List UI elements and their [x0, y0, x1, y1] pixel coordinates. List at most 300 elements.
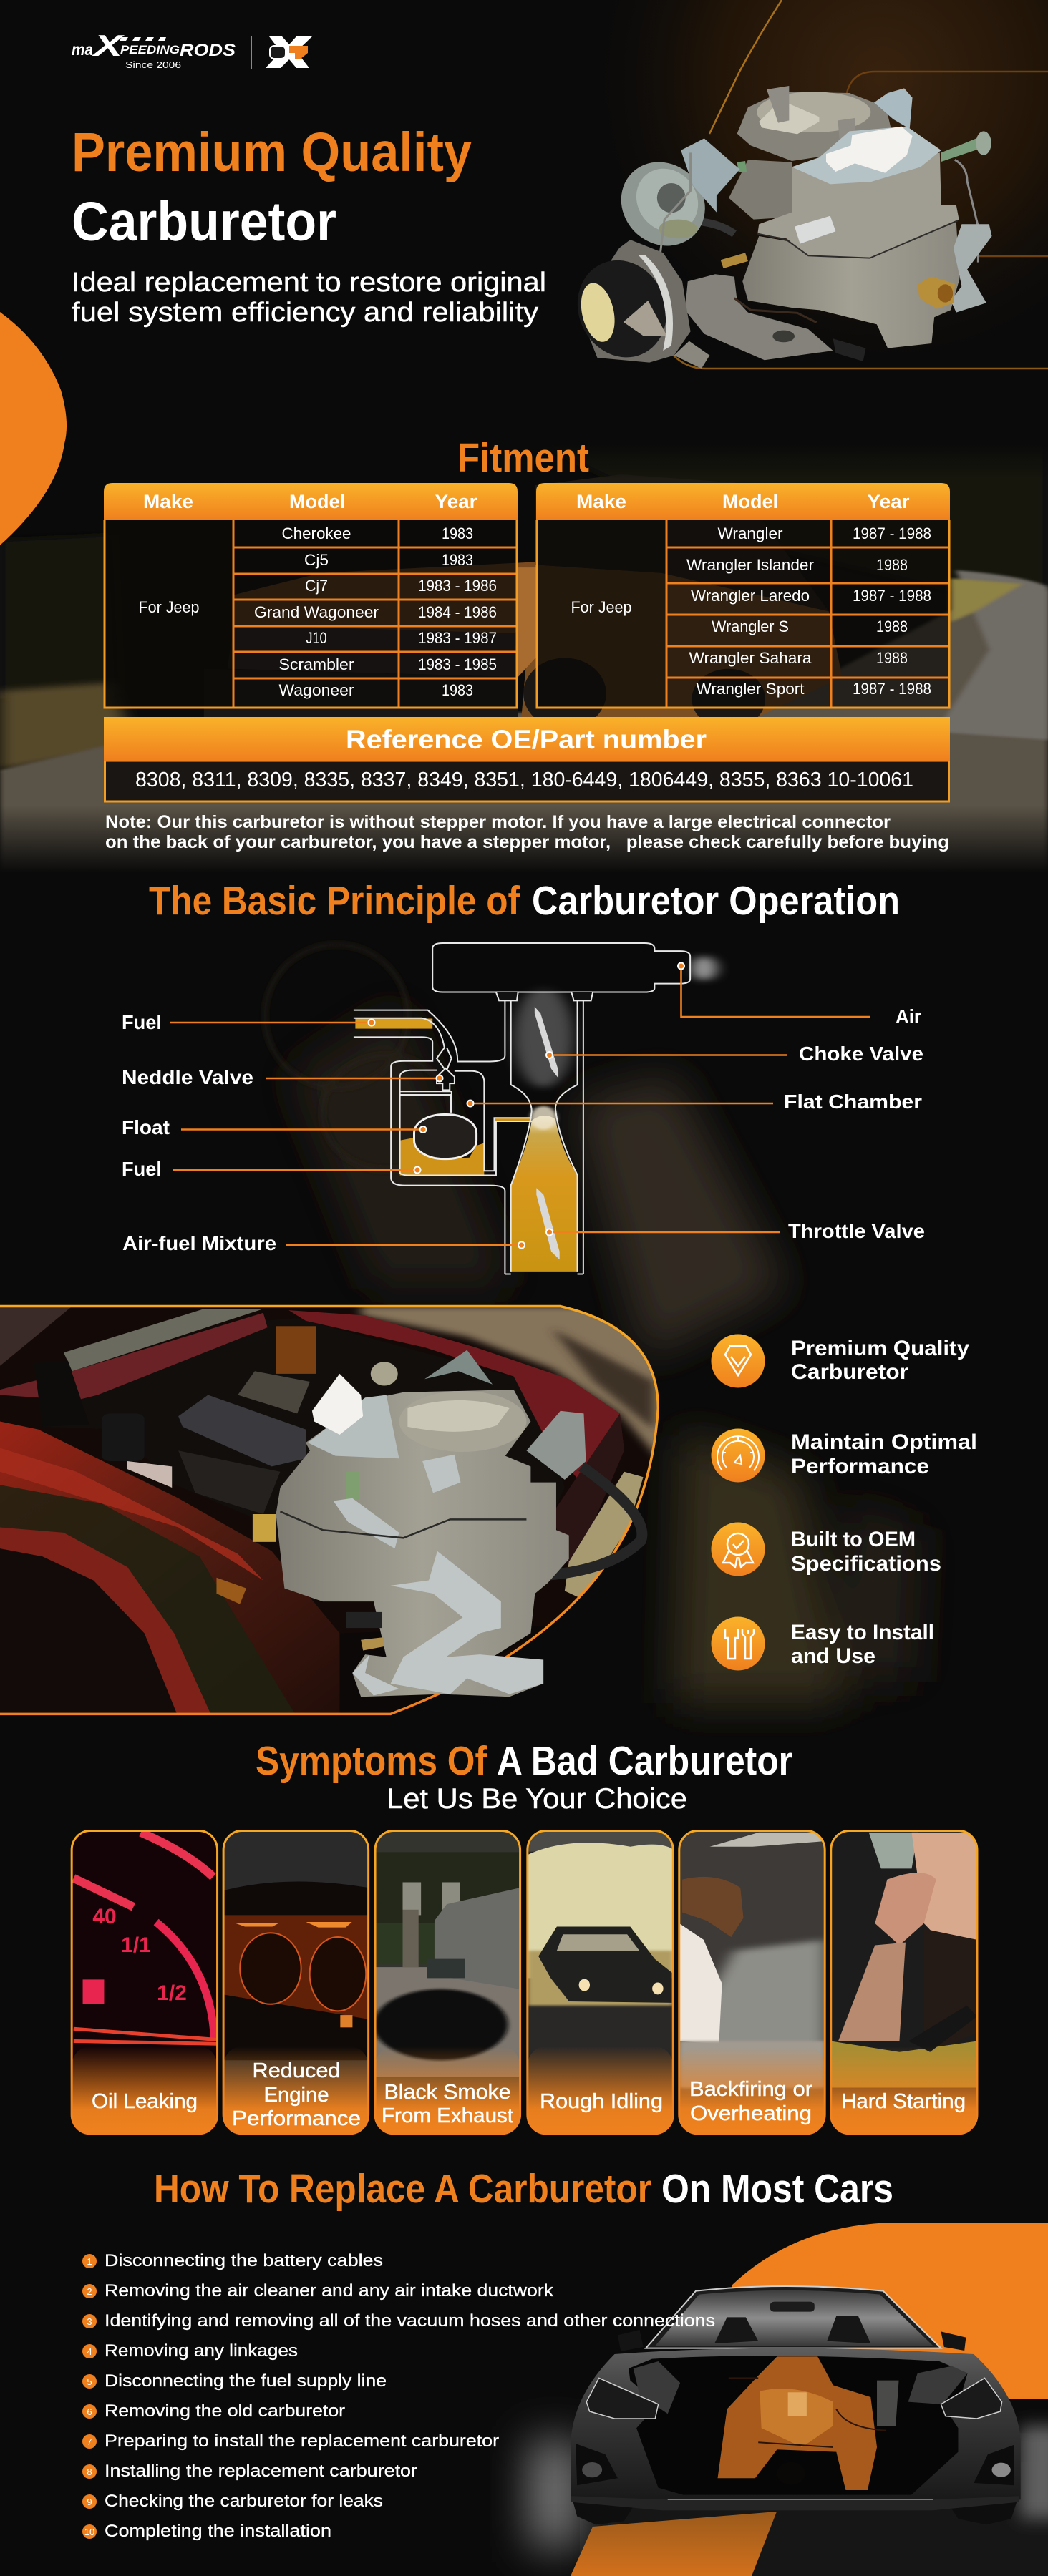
body seam [757, 220, 958, 258]
right grille [552, 1413, 624, 1567]
table right models: Wrangler Sahara [689, 649, 812, 667]
diagram labels [122, 1005, 925, 1254]
engine top [238, 1371, 310, 1413]
brass nipple [361, 1637, 384, 1651]
stepper motor note: on the back of your carburetor, you have a stepper motor, please check carefully before buying [105, 832, 949, 852]
rear-view mirror [770, 2302, 815, 2312]
card image: black smoke [373, 1830, 520, 2134]
symptom labels: Overheating [690, 2102, 812, 2125]
outlet pipe [674, 341, 709, 369]
choke link [422, 1455, 461, 1493]
horn [399, 1391, 526, 1452]
white cap [826, 127, 913, 173]
logo wordmark: PEEDING [120, 43, 180, 57]
table left years: 1983 - 1987 [418, 629, 497, 647]
white cap [312, 1374, 363, 1435]
table left years: 1983 - 1986 [418, 577, 497, 595]
mixture column [511, 1116, 578, 1272]
splitter highlight [668, 2499, 933, 2500]
fitment background photo [0, 441, 1048, 887]
hero title line 1: Premium Quality [72, 122, 472, 183]
feature text [791, 1528, 941, 1576]
engine dark bore [777, 2462, 805, 2485]
top left strut [0, 1307, 72, 1366]
step number digits: 6 [87, 2406, 92, 2417]
table right years: 1987 - 1988 [853, 680, 931, 698]
step text: Checking the carburetor for leaks [105, 2492, 383, 2511]
horn opening [757, 92, 870, 132]
coolant cap [371, 1362, 398, 1386]
fog lamp left [582, 2462, 602, 2477]
yellow insulator [576, 280, 619, 344]
logo X badge [266, 36, 312, 68]
diagram labels: Fuel [122, 1158, 162, 1180]
table left years [418, 525, 497, 699]
card image: hard starting [831, 1830, 977, 2134]
left glass [64, 1309, 263, 1371]
symptom card images [72, 1830, 977, 2134]
table right models: Wrangler [717, 525, 783, 542]
table left column titles [143, 491, 477, 512]
throttle valve plate [536, 1188, 560, 1259]
step text: Removing the air cleaner and any air intake ductwork [105, 2281, 554, 2301]
table right years: 1987 - 1988 [853, 587, 931, 605]
panel outline [0, 1307, 658, 1714]
tube end [976, 131, 991, 155]
gauge markings: 40 [92, 1905, 117, 1928]
step number digits: 7 [87, 2436, 92, 2447]
symptom labels [92, 2059, 966, 2130]
passage fuel [494, 1118, 532, 1121]
logo checker marks [120, 37, 166, 41]
black hose [702, 222, 734, 234]
fog lights [576, 2444, 1014, 2485]
red fender [0, 1421, 382, 1717]
seats [714, 2316, 870, 2343]
diagram labels: Fuel [122, 1011, 162, 1033]
feature: performance [712, 1428, 977, 1483]
jeep side [521, 565, 842, 718]
inlet fuel [355, 1019, 432, 1029]
lid plate [308, 1395, 399, 1458]
air intake glow [691, 957, 717, 980]
card image: fuel gauge [72, 1830, 218, 2134]
table right column titles: Year [868, 491, 910, 512]
table left frame [105, 520, 517, 708]
feature text [791, 1337, 969, 1384]
throat walls [354, 1000, 583, 1274]
table left make cell [104, 520, 233, 708]
carburetor on panel [253, 1350, 642, 1697]
choke housing [568, 240, 691, 365]
table right header [536, 483, 950, 520]
diaphragm [526, 1411, 586, 1480]
engine highlight [760, 2389, 833, 2447]
windshield [655, 2290, 933, 2346]
diagram heading: Carburetor Operation [532, 878, 900, 924]
green tube [941, 136, 982, 162]
step text: Removing any linkages [105, 2341, 298, 2361]
left hillside [6, 537, 103, 690]
lower road fade [0, 812, 1048, 873]
table left column titles: Make [143, 491, 193, 512]
upper body [757, 152, 959, 259]
table right models: Wrangler Laredo [691, 587, 810, 605]
step number digits: 5 [87, 2376, 92, 2387]
hero subtitle [72, 268, 546, 328]
jeep grille [227, 625, 518, 677]
gasket [734, 298, 817, 323]
step text [105, 2251, 715, 2541]
brass plug [253, 1514, 276, 1542]
icon: award [712, 1523, 765, 1576]
choke valve plate [535, 1007, 558, 1078]
hero outline frame [674, 0, 1048, 369]
needle valve [437, 1068, 455, 1090]
table right models: Wrangler S [712, 618, 789, 635]
symptoms subheading: Let Us Be Your Choice [387, 1783, 687, 1815]
lid plate [792, 127, 941, 184]
table left header [104, 483, 518, 520]
green slot [346, 1472, 359, 1500]
lower body [742, 222, 959, 348]
float chamber fuel [400, 1138, 484, 1176]
photo coordinates group [0, 441, 1048, 887]
table right models: Wrangler Islander [686, 556, 814, 574]
float chamber walls [400, 1070, 532, 1176]
fog lamp right [992, 2463, 1011, 2477]
diagram labels: Choke Valve [799, 1043, 923, 1065]
hero title line 2: Carburetor [72, 191, 336, 253]
reference header bar [104, 717, 950, 761]
spring [346, 1612, 382, 1628]
feature text: Built to OEM [791, 1528, 916, 1551]
red car engine bay panel [0, 1302, 666, 1717]
table right models: Wrangler Sport [696, 680, 805, 698]
horn inner [407, 1400, 510, 1432]
table right column titles [576, 491, 910, 512]
feature text: Maintain Optimal [791, 1430, 977, 1454]
table left column titles: Model [289, 491, 345, 512]
gauge markings [92, 1905, 187, 2005]
left engine detail [634, 2361, 680, 2414]
step text: Installing the replacement carburetor [105, 2462, 417, 2481]
venturi smoke [530, 1106, 557, 1130]
gasket seam [280, 1511, 526, 1538]
floor glow left [530, 2440, 580, 2547]
left verge [0, 683, 134, 770]
engine bay [629, 2356, 968, 2495]
symptom labels: Oil Leaking [92, 2090, 198, 2113]
feature text: Carburetor [791, 1360, 908, 1384]
metal arm [624, 301, 667, 336]
side mirrors [618, 2330, 966, 2351]
table left years: 1983 [442, 681, 473, 699]
step number digits: 9 [87, 2497, 92, 2507]
float [414, 1114, 477, 1159]
feature text [791, 1430, 977, 1478]
table right years: 1988 [876, 618, 908, 635]
oil bottle [276, 1326, 316, 1374]
chrome trim [565, 1472, 644, 1599]
jeep cab [535, 476, 624, 565]
symptom labels: Black Smoke [384, 2081, 511, 2104]
diagram marker dots [368, 963, 684, 1248]
card borders [72, 1831, 977, 2134]
floor base [594, 2447, 1048, 2576]
diagram heading [149, 878, 900, 924]
table right years [853, 525, 931, 698]
tires [573, 2499, 1017, 2524]
logo wordmark: ma [72, 40, 93, 59]
hoop forms [265, 945, 451, 1170]
symptoms heading: A Bad Carburetor [497, 1738, 792, 1784]
logo divider [251, 36, 252, 69]
table left body [233, 520, 518, 708]
top horn [737, 92, 893, 161]
table left models: Grand Wagoneer [254, 603, 379, 621]
wheel [0, 1548, 178, 1717]
logo wordmark: X [92, 29, 125, 62]
reference numbers: 8308, 8311, 8309, 8335, 8337, 8349, 8351, 180-6449, 1806449, 8355, 8363 10-10061 [135, 769, 913, 791]
symptom labels: Engine [263, 2084, 329, 2107]
right engine detail [908, 2366, 968, 2404]
logo tagline: Since 2006 [125, 59, 181, 70]
reference part number panel [104, 717, 950, 801]
hero subtitle: Ideal replacement to restore original [72, 268, 546, 298]
rod [955, 160, 978, 263]
jeep fender bright [518, 567, 535, 677]
green nipple [737, 161, 747, 172]
body [276, 1390, 569, 1697]
how-to heading: How To Replace A Carburetor [154, 2166, 651, 2212]
mounting feet [496, 992, 593, 1000]
table right frame [537, 520, 949, 708]
dark lower area [339, 1625, 552, 1717]
table right years: 1988 [876, 649, 908, 667]
lower solid fade [0, 873, 1048, 887]
marker light [216, 1578, 246, 1604]
table left years: 1984 - 1986 [418, 603, 497, 621]
feature text: and Use [791, 1644, 875, 1668]
hero subtitle: fuel system efficiency and reliability [72, 298, 538, 328]
brass fitting [918, 277, 955, 309]
table left years: 1983 [442, 551, 473, 569]
symptom labels: Performance [232, 2107, 361, 2130]
main road [0, 590, 1048, 887]
engine bay [42, 1318, 565, 1527]
diagram heading: The Basic Principle of [149, 878, 520, 924]
icon: gauge [712, 1428, 765, 1483]
hose [548, 1466, 642, 1575]
green reflection [0, 1485, 297, 1717]
wire link [660, 152, 691, 253]
symptoms heading: Symptoms Of [256, 1738, 487, 1784]
top fade [551, 444, 1042, 455]
symptom labels: Backfiring or [689, 2078, 812, 2101]
replacement steps list [82, 2251, 715, 2541]
tree line right [596, 468, 1042, 584]
step number digits: 2 [87, 2286, 92, 2297]
table left years: 1983 - 1985 [418, 655, 497, 673]
hero background glow [544, 0, 1048, 401]
feature text: Easy to Install [791, 1621, 934, 1644]
gauge markings: 1/1 [121, 1933, 151, 1957]
table right models [686, 525, 814, 698]
feature text: Specifications [791, 1552, 941, 1576]
step number digits: 10 [84, 2527, 94, 2537]
lever [391, 1551, 543, 1694]
table right make: For Jeep [571, 598, 631, 616]
body [571, 2348, 1021, 2509]
replace section orange shape [732, 2223, 1048, 2399]
fender highlight [0, 1448, 263, 1580]
step number digits [84, 2256, 94, 2537]
left neck [729, 160, 792, 220]
decorative orange blob [0, 312, 67, 545]
table left years: 1983 [442, 525, 473, 542]
fitment heading: Fitment [457, 435, 589, 481]
table left models: Scrambler [279, 655, 354, 673]
silver pipe [795, 216, 835, 244]
floor glow right [1020, 2426, 1048, 2519]
card orange fades [72, 2046, 977, 2134]
symptom labels: Rough Idling [540, 2090, 663, 2113]
step text: Disconnecting the battery cables [105, 2251, 383, 2270]
table left grid [233, 520, 518, 708]
feature: premium quality [712, 1334, 969, 1388]
table right grid [666, 520, 950, 708]
table left models [254, 525, 379, 699]
step numbers [82, 2254, 97, 2539]
step text: Preparing to install the replacement carburetor [105, 2431, 499, 2451]
diagram labels: Flat Chamber [784, 1091, 922, 1113]
step number digits: 4 [87, 2346, 92, 2357]
brass nipple [721, 253, 748, 268]
valve cover [178, 1395, 306, 1466]
step text: Disconnecting the fuel supply line [105, 2371, 387, 2391]
card image: dashboard [223, 1830, 369, 2134]
diagram leader lines [170, 966, 870, 1245]
logo wordmark: RODS [180, 41, 236, 60]
housing rim [578, 240, 691, 363]
diagram labels: Air-fuel Mixture [122, 1232, 276, 1254]
base flange [685, 274, 833, 360]
silver rim [639, 255, 673, 351]
bokeh shadow stripe [552, 1329, 654, 1430]
card image: overheating [679, 1830, 825, 2134]
left hook [352, 1654, 399, 1695]
left hood edge [0, 1313, 268, 1400]
icon: gem [712, 1334, 765, 1388]
stepper motor note: Note: Our this carburetor is without stepper motor. If you have a large electrical connector [105, 812, 891, 832]
panel base [0, 1302, 666, 1717]
floor stripe [571, 2512, 777, 2576]
engine background photo [265, 945, 923, 1703]
black cap [568, 253, 676, 365]
diagram labels: Air [896, 1005, 921, 1028]
how-to heading: On Most Cars [661, 2166, 893, 2212]
filter can [102, 1413, 145, 1461]
logo [72, 29, 312, 70]
splitter [571, 2496, 1019, 2510]
carburetor operation diagram [354, 943, 717, 1274]
feature: oem [712, 1523, 941, 1576]
engine bright plate [788, 2392, 807, 2416]
left bracket [681, 138, 739, 213]
fitment table left [104, 483, 518, 708]
symptom labels: Hard Starting [841, 2090, 966, 2113]
manifold [178, 1450, 280, 1514]
table right column titles: Model [722, 491, 778, 512]
bracket top right [874, 88, 913, 129]
far wheel [692, 668, 765, 717]
table right make cell [536, 520, 666, 708]
table left models: Cj5 [304, 551, 329, 569]
diagram labels: Float [122, 1116, 170, 1138]
arm [334, 1498, 399, 1548]
step text: Removing the old carburetor [105, 2401, 345, 2421]
top linkage [424, 1350, 493, 1385]
red hood right [288, 1310, 624, 1488]
feature text [791, 1621, 934, 1668]
feature: install [712, 1617, 934, 1670]
table right years: 1987 - 1988 [853, 525, 931, 542]
hero carburetor image [568, 86, 992, 369]
photo content [0, 1302, 666, 1717]
engine blurred forms [286, 1002, 923, 1703]
diagram labels: Throttle Valve [788, 1220, 925, 1242]
symptom labels: From Exhaust [382, 2104, 513, 2127]
bokeh background [361, 1307, 666, 1466]
fitment table right [536, 483, 950, 708]
hood prop [34, 1360, 89, 1427]
headlights [586, 2378, 1002, 2419]
table left make: For Jeep [139, 598, 199, 616]
road surface right [936, 570, 1048, 740]
table left column titles: Year [435, 491, 477, 512]
step text: Completing the installation [105, 2522, 331, 2541]
reservoir [127, 1461, 172, 1488]
step number digits: 1 [87, 2256, 92, 2267]
air filter housing [432, 943, 690, 992]
stepper motor note [105, 812, 949, 852]
engine orange [718, 2356, 877, 2490]
air stream [514, 987, 573, 1088]
choke posts [767, 86, 855, 143]
cabin roof frame [646, 2286, 941, 2348]
table left models: Wagoneer [279, 681, 354, 699]
vacuum diaphragm [609, 152, 717, 255]
choke plate [759, 100, 819, 134]
icon: tools [712, 1617, 765, 1670]
jeep bumper [204, 708, 518, 717]
gauge markings: 1/2 [157, 1981, 187, 2005]
step text: Identifying and removing all of the vacuum hoses and other connections [105, 2311, 715, 2331]
step number digits: 8 [87, 2467, 92, 2477]
table left models: Cj7 [305, 577, 328, 595]
feature text: Premium Quality [791, 1337, 969, 1360]
brass bore [938, 284, 953, 303]
wheels [523, 658, 606, 717]
grey engine side [877, 2381, 899, 2426]
right bracket [951, 224, 992, 313]
yellow grass [951, 578, 1023, 623]
symptom labels: Reduced [252, 2059, 341, 2082]
table right body [666, 520, 950, 708]
wheel arch [0, 1527, 213, 1717]
feature text: Performance [791, 1455, 929, 1478]
